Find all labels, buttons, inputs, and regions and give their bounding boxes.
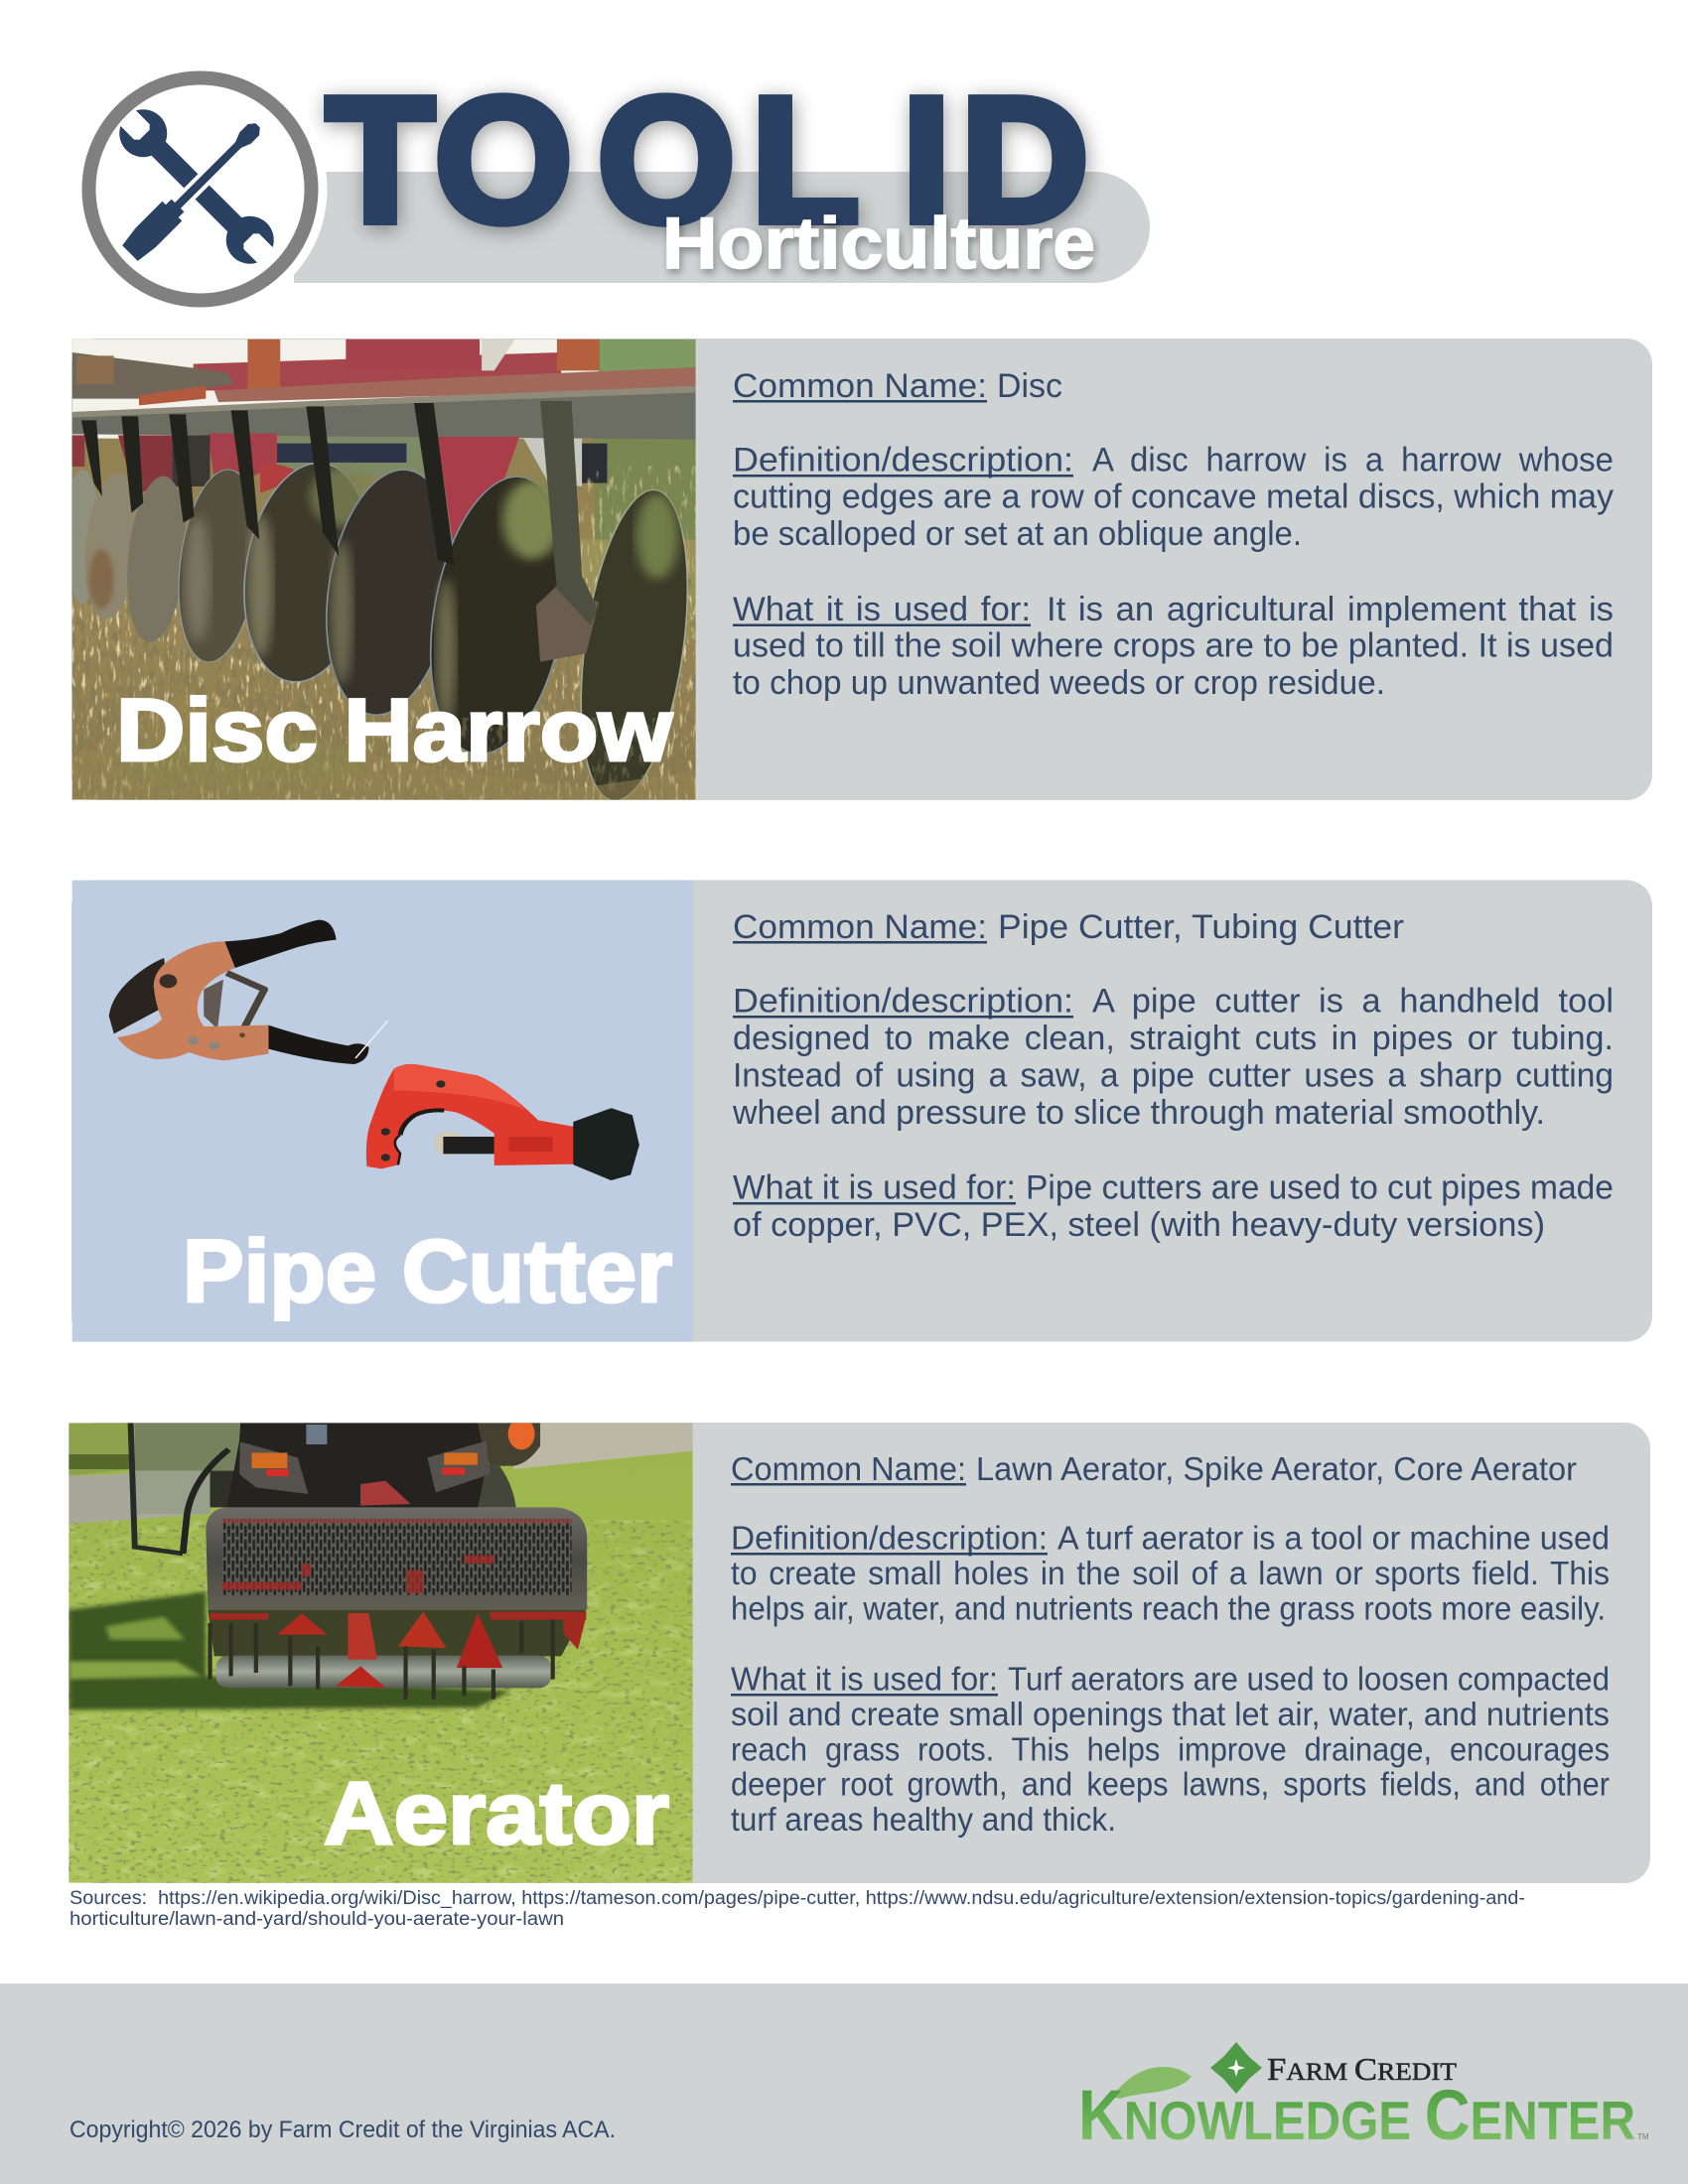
text: definition: designed to make clean, straight cuts in pipes or tubing. (733, 1020, 1614, 1057)
text: what it is used for: deeper root growth, and keeps lawns, sports fields, and other (731, 1765, 1610, 1803)
text: what it is used for: What it is used for: (733, 1169, 1016, 1207)
text: what it is used for (733, 1169, 1614, 1244)
text: definition (733, 441, 1614, 553)
text: definition: Definition/description: (733, 983, 1073, 1021)
copyright: Copyright© 2026 by Farm Credit of the Virginias ACA. (70, 2116, 616, 2143)
text: definition: be scalloped or set at an oblique angle. (733, 515, 1302, 553)
panel background (71, 339, 1652, 800)
grass texture (72, 579, 696, 800)
text: common name: Lawn Aerator, Spike Aerator, Core Aerator (976, 1450, 1577, 1487)
text: definition (731, 1519, 1610, 1626)
photo: lawn aerator (69, 1418, 693, 1883)
photo panel: pipe cutters on blue (72, 881, 693, 1342)
tractor (474, 1423, 540, 1466)
text: what it is used for (731, 1660, 1610, 1838)
text: definition: helps air, water, and nutrients reach the grass roots more easily. (731, 1590, 1606, 1626)
lawn shadow (69, 1591, 511, 1709)
icon: leaf (1112, 2067, 1192, 2099)
text: what it is used for: What it is used for: (731, 1660, 998, 1698)
text: what it is used for: reach grass roots. This helps improve drainage, encourages (731, 1731, 1610, 1767)
text: FARM CREDIT: FARM CREDIT (1267, 2051, 1457, 2087)
mirror and hose (131, 1423, 183, 1554)
text: KNOWLEDGE CENTER: KNOWLEDGE CENTER (1078, 2077, 1635, 2155)
underside (208, 1610, 586, 1656)
aerator hood (206, 1507, 587, 1610)
sources note: horticulture/lawn-and-yard/should-you-aerate-your-lawn (70, 1909, 564, 1930)
text: trademark: TM (1637, 2132, 1649, 2141)
icon: red tubing cutter (366, 1064, 638, 1179)
text: what it is used for (733, 591, 1614, 702)
icon: farm credit diamond (1210, 2042, 1262, 2094)
text: definition: Definition/description: (733, 441, 1073, 478)
header grey pill (294, 172, 1150, 283)
text: definition: wheel and pressure to slice through material smoothly. (732, 1094, 1545, 1132)
text: what it is used for: of copper, PVC, PEX, steel (with heavy-duty versions) (733, 1206, 1545, 1244)
icon: ratchet pipe cutter (109, 920, 387, 1064)
text: what it is used for: What it is used for: (733, 591, 1031, 628)
image label: Pipe Cutter: Pipe Cutter (183, 1221, 672, 1320)
text: definition: A disc harrow is a harrow whose (1092, 441, 1614, 478)
text: common name: Disc (997, 367, 1062, 405)
text: what it is used for: Pipe cutters are used to cut pipes made (1026, 1169, 1614, 1207)
text: what it is used for: Turf aerators are used to loosen compacted (1008, 1660, 1610, 1698)
footer band (0, 1983, 1688, 2184)
text: common name: Common Name: (731, 1450, 966, 1487)
subtitle: Horticulture: Horticulture (662, 204, 1095, 284)
text: definition: Definition/description: (731, 1519, 1048, 1557)
header banner (73, 61, 1150, 316)
text: definition: Instead of using a saw, a pipe cutter uses a sharp cutting (733, 1056, 1614, 1094)
text: definition (732, 983, 1614, 1132)
panel: pipe cutter (71, 880, 1652, 1342)
text: definition: A turf aerator is a tool or machine used (1057, 1519, 1610, 1557)
sources note (70, 1888, 1525, 1930)
text: common name: Pipe Cutter, Tubing Cutter (998, 908, 1404, 946)
discs (71, 470, 97, 604)
text: what it is used for: used to till the soil where crops are to be planted. It is used (733, 627, 1614, 665)
text: common name (733, 908, 1404, 946)
panel: aerator (69, 1418, 1650, 1883)
disc arms (81, 403, 455, 566)
text: what it is used for: soil and create small openings that let air, water, and nutrients (731, 1696, 1610, 1732)
text: common name: Common Name: (733, 367, 987, 405)
panel background (70, 1423, 1650, 1883)
text: what it is used for: turf areas healthy and thick. (731, 1801, 1116, 1838)
lawn texture (69, 1521, 693, 1883)
logo: Farm Credit Knowledge Center (1078, 2042, 1649, 2155)
text: what it is used for: to chop up unwanted weeds or crop residue. (733, 664, 1385, 702)
panel: disc harrow (65, 339, 1652, 805)
text: definition: A pipe cutter is a handheld tool (1092, 983, 1614, 1021)
text: definition: cutting edges are a row of concave metal discs, which may (733, 478, 1614, 516)
icon: wrench and screwdriver in ring (73, 62, 328, 316)
title: TOOL ID: TOOL ID (326, 61, 1089, 260)
grass in front (72, 692, 696, 800)
text: definition: to create small holes in the soil of a lawn or sports field. This (731, 1555, 1610, 1591)
text: common name: Common Name: (733, 908, 987, 946)
sources note: Sources: https://en.wikipedia.org/wiki/Disc_harrow, https://tameson.com/pages/pipe-cutter, https://www.ndsu.edu/agriculture/extension/extension-topics/gardening-and- (70, 1888, 1525, 1909)
photo: disc harrow (65, 340, 704, 805)
text: what it is used for: It is an agricultural implement that is (1047, 591, 1614, 628)
footer (0, 1983, 1688, 2184)
panel background (71, 880, 1652, 1342)
image label: Aerator: Aerator (324, 1763, 669, 1862)
image label: Disc Harrow: Disc Harrow (116, 680, 673, 779)
